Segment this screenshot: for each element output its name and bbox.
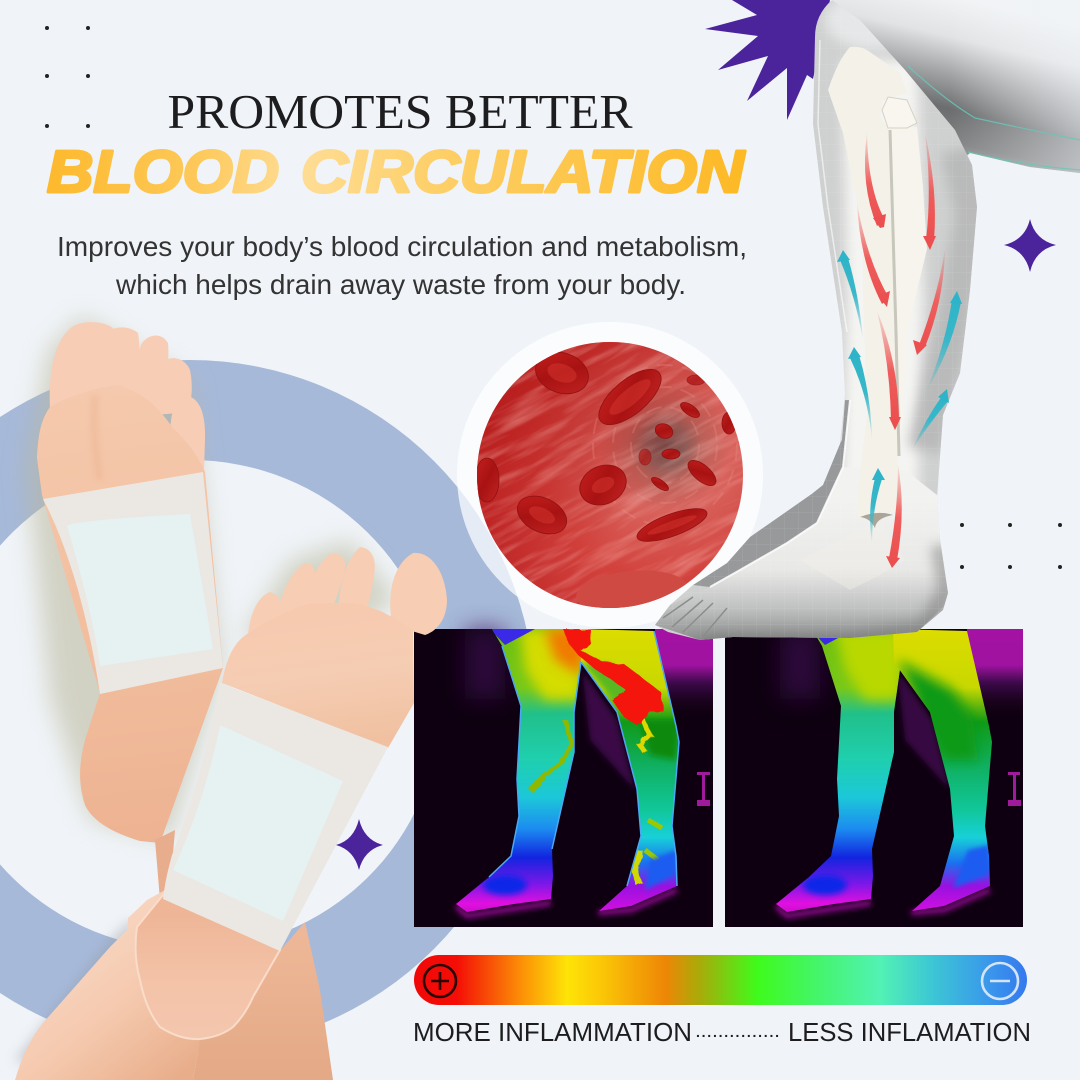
description text: [57, 231, 747, 300]
upper foot sole: [37, 385, 223, 843]
heading line two: BLOOD: [47, 139, 279, 205]
blood vessel circle: [457, 322, 763, 628]
lower foot: [163, 547, 447, 951]
right leg after: [893, 630, 992, 911]
minus icon: [982, 963, 1018, 999]
right gray band: [925, 150, 972, 450]
description text: Improves your body’s blood circulation and metabolism,: [57, 231, 747, 262]
upper foot band: [43, 472, 223, 694]
heading line one: PROMOTES BETTER: [168, 84, 633, 139]
dot grid top left: [45, 26, 90, 128]
right lower leg: [193, 922, 333, 1080]
left leg outline: [489, 646, 581, 877]
toes shadow: [240, 540, 400, 640]
heel shade: [700, 545, 947, 644]
thigh: [830, 0, 1080, 175]
tunnel rings: [593, 365, 737, 525]
lower foot sole: [222, 603, 414, 748]
large foreground cell: [576, 570, 687, 608]
right leg before: [580, 629, 678, 911]
bone groove: [890, 130, 899, 456]
bones: [800, 47, 927, 590]
toe separators: [663, 597, 727, 640]
scale mark: [1008, 772, 1021, 806]
burst shape: [705, 0, 830, 120]
foot glow: [456, 890, 677, 916]
left edge highlight: [818, 40, 847, 332]
red arrows: [857, 133, 936, 307]
description text: which helps drain away waste from your body.: [115, 269, 686, 300]
scale mark: [697, 772, 710, 806]
calf shadow band: [693, 400, 850, 587]
leg anatomy illustration: [650, 0, 1080, 645]
top knee light: [821, 1, 888, 52]
foot bones: [800, 520, 905, 590]
far heel sliver: [155, 830, 175, 900]
red vein: [563, 629, 664, 725]
feet with detox patches: [15, 316, 447, 1080]
foot glow: [776, 890, 990, 916]
lower foot heel: [136, 895, 280, 1039]
sparkle icon on foot: [336, 819, 383, 870]
dot grid right: [960, 523, 1062, 569]
lower foot band: [163, 683, 388, 951]
scale label: more inflammation: MORE INFLAMMATION: [413, 1017, 692, 1047]
lower leg: [650, 0, 990, 645]
thermal image: after: [725, 629, 1023, 927]
plus icon: [424, 965, 456, 997]
upper foot patch: [67, 514, 213, 666]
upper foot arch shade: [94, 395, 100, 480]
foot shadow: [26, 316, 222, 840]
light interior: [880, 60, 885, 500]
left leg before: [450, 629, 590, 919]
heading line two: [47, 139, 746, 205]
yellow squiggle: [640, 715, 650, 752]
upper foot toes: [50, 322, 205, 470]
fibula head cap: [882, 97, 917, 128]
decorative ring: [0, 360, 535, 1050]
white edge line: [710, 400, 850, 587]
upper foot: [37, 322, 223, 843]
fibula: [888, 127, 927, 456]
leg shadow: [15, 920, 150, 1080]
heading line two: CIRCULATION: [301, 139, 746, 205]
scale label: less inflammation: LESS INFLAMATION: [788, 1017, 1031, 1047]
cell centres: [526, 360, 698, 538]
right leg outline: [581, 631, 679, 886]
tibia: [828, 47, 907, 519]
left lower leg: [15, 890, 200, 1080]
more red arrows: [877, 249, 945, 568]
left leg after: [776, 634, 900, 912]
ankle shade: [860, 513, 893, 528]
inflammation scale bar: [414, 955, 1027, 1005]
sparkle icon right: [1004, 219, 1056, 272]
scale dotted connector: ...............: [696, 1024, 779, 1040]
foot: [655, 467, 950, 640]
thermal image: before: [414, 629, 713, 927]
teal arrows: [837, 250, 962, 543]
lower foot patch: [173, 725, 343, 921]
lower foot toes: [248, 547, 447, 635]
